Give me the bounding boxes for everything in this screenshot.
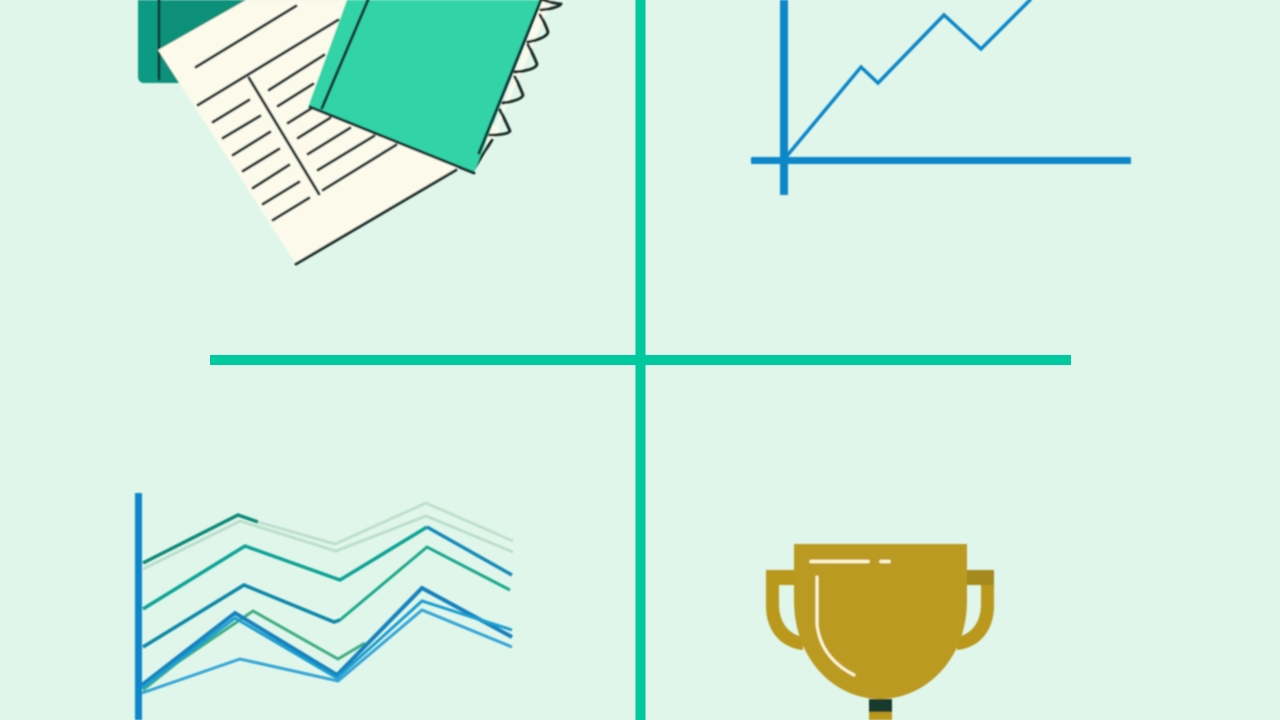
axis: [135, 493, 142, 720]
axes: [751, 0, 1131, 195]
icon: trophy: [766, 544, 994, 720]
divider cross: [210, 0, 1071, 720]
handles: [766, 570, 994, 650]
stem: [869, 699, 892, 712]
highlights: [811, 562, 889, 675]
line chart: growth: [751, 0, 1131, 195]
growth line: [786, 0, 1030, 157]
back teal book: [138, 0, 260, 83]
icon: documents and notebook: [138, 0, 561, 264]
multi-line chart: [135, 493, 513, 720]
cup: [794, 544, 967, 699]
paper sheet: [158, 0, 500, 264]
faded lines: [143, 503, 513, 569]
notebook: [308, 0, 541, 173]
teal and blue lines: [142, 515, 512, 693]
spiral binding: [472, 0, 561, 172]
